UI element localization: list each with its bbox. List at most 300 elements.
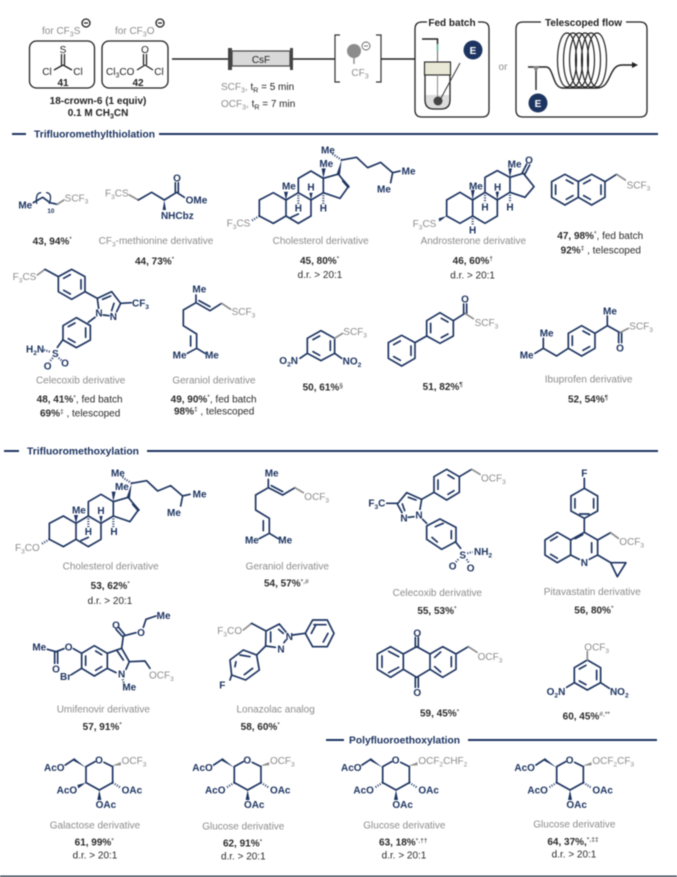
compound 49 geraniol derivative: 3 xyxy=(252,312,256,319)
reagent 42 box xyxy=(102,41,168,89)
compound 63 glucose derivative: AcO xyxy=(341,763,362,774)
compound 56 pitavastatin derivative: N xyxy=(581,558,588,569)
compound 52 ibuprofen derivative: Ibuprofen derivative xyxy=(545,375,633,386)
compound 49 geraniol derivative: ‡ xyxy=(194,406,198,413)
compound 60 dinitro OCF3 arene: 2 xyxy=(554,692,558,699)
compound 62 glucose derivative: O xyxy=(243,755,251,766)
compound 46 androsterone derivative: O xyxy=(525,156,533,167)
compound 46 androsterone derivative: CS xyxy=(422,219,437,230)
compound 53 cholesterol derivative: Me xyxy=(167,508,181,519)
compound 50 dinitro arene: NO xyxy=(343,357,358,368)
compound 47 naphthalene: 47, 98% xyxy=(557,231,594,242)
compound 59 anthraquinone: O xyxy=(413,629,421,640)
compound 53 cholesterol derivative: Me xyxy=(193,490,207,501)
residence time SCF3: R xyxy=(253,88,258,94)
compound 44: OMe xyxy=(186,196,208,207)
compound 50 dinitro arene: SCF xyxy=(343,327,363,338)
compound 60 dinitro OCF3 arene: NO xyxy=(610,687,625,698)
compound 64 glucose derivative: 3 xyxy=(630,761,634,768)
compound 46 androsterone derivative: H xyxy=(494,183,501,194)
compound 54 geraniol derivative: Me xyxy=(265,469,279,480)
compound 48 celecoxib derivative: 69% xyxy=(40,409,60,420)
compound 57 umifenovir derivative: O xyxy=(137,628,145,639)
compound 51 biphenyl thioester: 51, 82% xyxy=(423,382,459,393)
compound 61 galactose derivative: d.r. > 20:1 xyxy=(73,850,118,861)
compound 56 pitavastatin derivative: 3 xyxy=(640,542,644,549)
compound 46 androsterone derivative: H xyxy=(481,202,489,213)
compound 61 galactose derivative xyxy=(44,755,147,861)
compound 62 glucose derivative: 62, 91% xyxy=(223,839,260,850)
compound 49 geraniol derivative: , telescoped xyxy=(198,406,254,417)
compound 47 naphthalene: 3 xyxy=(647,186,651,193)
compound 44 xyxy=(99,174,214,267)
compound 45 cholesterol derivative: F xyxy=(227,219,233,230)
icon: negative charge xyxy=(156,19,164,27)
compound 55 celecoxib derivative xyxy=(368,469,506,599)
compound 43: Me xyxy=(18,200,33,211)
telescoped flow panel: Telescoped flow xyxy=(545,18,622,29)
compound 63 glucose derivative: OAc xyxy=(392,800,413,811)
compound 48 celecoxib derivative: * xyxy=(73,394,76,401)
compound 53 cholesterol derivative: Me xyxy=(72,505,86,516)
compound 55 celecoxib derivative: N xyxy=(415,510,423,521)
compound 53 cholesterol derivative: Me xyxy=(115,482,129,493)
compound 52 ibuprofen derivative: SCF xyxy=(629,322,649,333)
compound 53 cholesterol derivative xyxy=(15,469,207,607)
compound 57 umifenovir derivative: Me xyxy=(32,643,47,654)
compound 63 glucose derivative: AcO xyxy=(353,785,374,796)
section heading: Trifluoromethylthiolation: Trifluoromethylthiolation xyxy=(34,130,155,140)
compound 52 ibuprofen derivative: Me xyxy=(520,351,534,362)
compound 52 ibuprofen derivative: ¶ xyxy=(605,394,609,401)
compound 47 naphthalene: , fed batch xyxy=(597,231,643,242)
compound 44: 44, 73% xyxy=(135,256,172,267)
compound 63 glucose derivative: d.r. > 20:1 xyxy=(382,850,427,861)
compound 49 geraniol derivative: Me xyxy=(205,351,219,362)
compound 54 geraniol derivative: 3 xyxy=(325,497,329,504)
yield 55: * xyxy=(454,606,457,613)
reagent 41 box xyxy=(30,41,94,89)
compound 44: O xyxy=(173,174,181,185)
compound 46 androsterone derivative: 3 xyxy=(419,224,423,231)
residence time SCF3: 3 xyxy=(241,88,245,94)
compound 44: 3 xyxy=(111,194,115,201)
compound 52 ibuprofen derivative: O xyxy=(616,343,624,354)
compound 55 celecoxib derivative: F xyxy=(368,499,374,510)
compound 47 naphthalene: SCF xyxy=(627,180,647,191)
compound 48 celecoxib derivative: , telescoped xyxy=(64,409,120,420)
compound 49 geraniol derivative xyxy=(171,284,257,417)
compound 62 glucose derivative: OCF xyxy=(270,756,291,767)
compound 61 galactose derivative: * xyxy=(111,837,114,844)
compound 54 geraniol derivative: Geraniol derivative xyxy=(246,561,329,572)
compound 57 umifenovir derivative: Umifenovir derivative xyxy=(57,705,150,716)
compound 63 glucose derivative: 63, 18% xyxy=(379,838,416,849)
label: for CF3O anion: 3 xyxy=(143,32,147,38)
compound 55 celecoxib derivative: O xyxy=(467,564,475,575)
compound 43: 43, 94% xyxy=(33,236,69,247)
compound 58 lonazolac analog: 3 xyxy=(223,631,227,638)
compound 50 dinitro arene: 3 xyxy=(363,332,367,339)
reagent 41 box: Cl xyxy=(42,67,52,78)
compound 62 glucose derivative: d.r. > 20:1 xyxy=(221,851,266,862)
compound 59 anthraquinone xyxy=(377,629,503,720)
compound 58 lonazolac analog: F xyxy=(219,681,225,692)
flow line with CsF column: CsF xyxy=(252,55,270,66)
compound 60 dinitro OCF3 arene: 2 xyxy=(625,692,629,699)
compound 44: -methionine derivative xyxy=(116,236,214,247)
compound 43: SCF xyxy=(65,193,85,204)
compound 44: CS xyxy=(115,189,129,200)
compound 46 androsterone derivative: 46, 60% xyxy=(453,256,489,267)
reagent 41 box: Cl xyxy=(73,67,83,78)
compound 47 naphthalene: 92% xyxy=(561,245,581,256)
fed batch panel: Fed batch xyxy=(428,18,476,29)
compound 48 celecoxib derivative: S xyxy=(52,349,59,360)
compound 59 anthraquinone: 3 xyxy=(499,657,503,664)
compound 48 celecoxib derivative: N xyxy=(110,312,117,323)
compound 43: 10 xyxy=(47,208,55,215)
compound 54 geraniol derivative: OCF xyxy=(304,492,325,503)
bracketed CF3 anion intermediate xyxy=(335,35,415,82)
compound 58 lonazolac analog: F xyxy=(217,626,223,637)
reagent 42 box: O xyxy=(141,45,149,56)
compound 64 glucose derivative: CF xyxy=(617,756,630,767)
compound 45 cholesterol derivative: H xyxy=(295,204,302,215)
compound 47 naphthalene: * xyxy=(594,231,597,238)
compound 60 dinitro OCF3 arene: N xyxy=(558,687,565,698)
residence time OCF3: OCF xyxy=(221,99,242,110)
compound 45 cholesterol derivative: H xyxy=(320,204,327,215)
compound 48 celecoxib derivative: , fed batch xyxy=(76,395,123,406)
compound 63 glucose derivative: OCF xyxy=(418,756,439,767)
compound 58 lonazolac analog: N xyxy=(277,645,285,656)
compound 48 celecoxib derivative: O xyxy=(44,361,52,372)
yield 56: * xyxy=(611,605,614,612)
or: or xyxy=(499,62,508,73)
compound 49 geraniol derivative: 49, 90% xyxy=(171,394,207,405)
compound 58 lonazolac analog: N xyxy=(286,632,293,643)
compound 50 dinitro arene: § xyxy=(339,382,343,389)
compound 64 glucose derivative: AcO xyxy=(514,763,535,774)
compound 59 anthraquinone: OCF xyxy=(478,652,499,663)
compound 57 umifenovir derivative: O xyxy=(112,620,120,631)
compound 57 umifenovir derivative: 3 xyxy=(170,676,174,683)
compound 53 cholesterol derivative: Me xyxy=(111,469,125,480)
compound 55 celecoxib derivative: NH xyxy=(474,547,488,558)
label: for CF3S anion: S xyxy=(74,26,81,37)
compound 49 geraniol derivative: * xyxy=(207,394,210,401)
compound 63 glucose derivative: 2 xyxy=(439,761,443,768)
compound 62 glucose derivative: OAc xyxy=(270,785,291,796)
compound 55 celecoxib derivative: 3 xyxy=(374,504,378,511)
compound 55 celecoxib derivative: 3 xyxy=(502,479,506,486)
compound 50 dinitro arene xyxy=(279,327,367,394)
compound 58 lonazolac analog xyxy=(217,620,334,733)
compound 64 glucose derivative: 2 xyxy=(613,761,617,768)
compound 59 anthraquinone: O xyxy=(413,688,421,699)
yield 56: 56, 80% xyxy=(574,605,611,616)
compound 45 cholesterol derivative: d.r. > 20:1 xyxy=(298,270,343,281)
compound 47 naphthalene xyxy=(552,174,651,256)
reagent 42 box: Cl xyxy=(106,67,115,78)
compound 60 dinitro OCF3 arene: O xyxy=(547,687,554,698)
compound 55 celecoxib derivative: S xyxy=(459,550,466,561)
reagent 42 box: CO xyxy=(119,67,135,78)
compound 53 cholesterol derivative: H xyxy=(85,527,92,538)
compound 55 celecoxib derivative: Celecoxib derivative xyxy=(393,588,482,599)
compound 44: 3 xyxy=(112,241,116,248)
compound 49 geraniol derivative: SCF xyxy=(232,307,252,318)
compound 53 cholesterol derivative: d.r. > 20:1 xyxy=(88,596,133,607)
residence time OCF3: = 7 min xyxy=(259,99,295,110)
compound 53 cholesterol derivative: 53, 62% xyxy=(91,581,127,592)
compound 62 glucose derivative: 3 xyxy=(291,761,295,768)
label: for CF3O anion: for CF xyxy=(115,26,143,37)
residence time OCF3: t xyxy=(252,99,254,110)
compound 61 galactose derivative: OAc xyxy=(96,800,117,811)
yield 55: 55, 53% xyxy=(417,606,454,617)
solvent text: 3 xyxy=(110,114,114,120)
compound 59 anthraquinone: 59, 45% xyxy=(420,709,457,720)
compound 57 umifenovir derivative: 57, 91% xyxy=(83,722,119,733)
compound 50 dinitro arene: 2 xyxy=(358,362,362,369)
compound 64 glucose derivative: d.r. > 20:1 xyxy=(552,849,597,860)
compound 48 celecoxib derivative: O xyxy=(61,359,69,370)
compound 64 glucose derivative: OAc xyxy=(592,785,613,796)
label: for CF3O anion: O xyxy=(147,26,155,37)
compound 45 cholesterol derivative: Me xyxy=(402,166,416,177)
compound 50 dinitro arene: 2 xyxy=(287,361,291,368)
compound 54 geraniol derivative: Me xyxy=(245,536,259,547)
compound 49 geraniol derivative: , fed batch xyxy=(210,394,257,405)
compound 61 galactose derivative: 61, 99% xyxy=(75,838,111,849)
reagent 41 box: 41 xyxy=(57,78,69,89)
compound 53 cholesterol derivative: H xyxy=(110,527,118,538)
compound 44: F xyxy=(105,189,111,200)
reagent 42 box: 42 xyxy=(132,78,144,89)
compound 47 naphthalene: , telescoped xyxy=(584,245,641,256)
compound 57 umifenovir derivative: * xyxy=(119,722,122,729)
compound 51 biphenyl thioester: 3 xyxy=(495,323,499,330)
compound 52 ibuprofen derivative: 3 xyxy=(649,327,653,334)
compound 46 androsterone derivative xyxy=(413,156,534,281)
compound 57 umifenovir derivative: N xyxy=(118,669,125,680)
compound 48 celecoxib derivative: F xyxy=(13,272,19,283)
compound 44: * xyxy=(172,256,175,263)
compound 51 biphenyl thioester xyxy=(388,295,499,393)
compound 55 celecoxib derivative: 2 xyxy=(488,552,492,559)
compound 48 celecoxib derivative: 3 xyxy=(145,304,149,311)
compound 55 celecoxib derivative: O xyxy=(449,561,457,572)
conditions text: 18-crown-6 (1 equiv) xyxy=(50,96,146,107)
compound 61 galactose derivative: 3 xyxy=(143,761,147,768)
residence time OCF3: 3 xyxy=(242,104,246,112)
telescoped flow panel: E xyxy=(535,99,542,110)
compound 52 ibuprofen derivative: 52, 54% xyxy=(568,395,605,406)
compound 62 glucose derivative: OAc xyxy=(244,800,265,811)
bracketed CF3 anion intermediate: 3 xyxy=(365,74,369,80)
compound 62 glucose derivative xyxy=(192,755,295,862)
compound 62 glucose derivative: AcO xyxy=(192,763,213,774)
compound 60 dinitro OCF3 arene: OCF xyxy=(584,643,605,654)
compound 64 glucose derivative xyxy=(514,755,634,860)
compound 56 pitavastatin derivative: OCF xyxy=(619,537,640,548)
compound 55 celecoxib derivative: C xyxy=(378,499,385,510)
compound 64 glucose derivative: O xyxy=(566,755,574,766)
compound 58 lonazolac analog: 58, 60% xyxy=(241,722,277,733)
compound 62 glucose derivative: Glucose derivative xyxy=(202,821,285,832)
compound 56 pitavastatin derivative: Pitavastatin derivative xyxy=(544,587,641,598)
solvent text: 0.1 M CH xyxy=(68,108,110,119)
compound 45 cholesterol derivative: 3 xyxy=(233,224,237,231)
compound 60 dinitro OCF3 arene xyxy=(547,643,629,722)
residence time SCF3: = 5 min xyxy=(258,82,294,93)
compound 50 dinitro arene: 50, 61% xyxy=(303,383,339,394)
compound 45 cholesterol derivative: H xyxy=(307,183,315,194)
compound 46 androsterone derivative: F xyxy=(413,219,419,230)
compound 61 galactose derivative: OCF xyxy=(122,756,143,767)
section heading: Polyfluoroethoxylation: Polyfluoroethoxylation xyxy=(349,736,460,746)
compound 51 biphenyl thioester: O xyxy=(461,295,469,306)
compound 53 cholesterol derivative: F xyxy=(15,543,21,554)
compound 48 celecoxib derivative: 3 xyxy=(19,277,23,284)
compound 63 glucose derivative: Glucose derivative xyxy=(363,820,446,831)
compound 61 galactose derivative: Galactose derivative xyxy=(50,820,141,831)
compound 54 geraniol derivative xyxy=(245,469,329,590)
residence time SCF3: SCF xyxy=(221,82,241,93)
compound 46 androsterone derivative: † xyxy=(489,256,493,263)
compound 48 celecoxib derivative: Celecoxib derivative xyxy=(36,375,126,386)
compound 46 androsterone derivative: Me xyxy=(469,181,483,192)
compound 61 galactose derivative: O xyxy=(95,755,103,766)
icon: negative charge xyxy=(82,19,90,27)
compound 43 xyxy=(18,193,89,247)
compound 45 cholesterol derivative: 45, 80% xyxy=(300,256,337,267)
compound 61 galactose derivative: AcO xyxy=(57,785,77,796)
compound 51 biphenyl thioester: ¶ xyxy=(459,382,463,389)
compound 48 celecoxib derivative: N xyxy=(37,345,44,356)
compound 63 glucose derivative xyxy=(341,755,468,861)
compound 64 glucose derivative: Glucose derivative xyxy=(533,819,616,830)
fed batch panel xyxy=(415,18,489,117)
compound 62 glucose derivative: AcO xyxy=(205,785,226,796)
compound 62 glucose derivative: * xyxy=(260,838,263,845)
compound 44: CF xyxy=(99,236,112,247)
compound 53 cholesterol derivative: 3 xyxy=(21,548,25,555)
compound 50 dinitro arene: O xyxy=(279,356,287,367)
compound 58 lonazolac analog: * xyxy=(277,722,280,729)
compound 53 cholesterol derivative: CO xyxy=(25,543,40,554)
compound 60 dinitro OCF3 arene: #,** xyxy=(599,711,610,718)
compound 57 umifenovir derivative: Me xyxy=(122,683,137,694)
compound 48 celecoxib derivative: 48, 41% xyxy=(37,395,73,406)
compound 64 glucose derivative: *,‡‡ xyxy=(587,837,599,844)
compound 54 geraniol derivative: 54, 57% xyxy=(264,579,301,590)
compound 64 glucose derivative: 64, 37%, xyxy=(547,837,587,848)
compound 53 cholesterol derivative: H xyxy=(97,506,105,517)
compound 45 cholesterol derivative: Me xyxy=(319,159,334,170)
compound 59 anthraquinone: * xyxy=(457,708,460,715)
compound 57 umifenovir derivative: Me xyxy=(157,611,171,622)
compound 54 geraniol derivative: Me xyxy=(278,536,293,547)
compound 45 cholesterol derivative: * xyxy=(337,256,340,263)
compound 53 cholesterol derivative: Cholesterol derivative xyxy=(63,561,159,572)
compound 53 cholesterol derivative: * xyxy=(127,581,130,588)
compound 45 cholesterol derivative: CS xyxy=(236,219,251,230)
compound 64 glucose derivative: OCF xyxy=(592,756,613,767)
compound 57 umifenovir derivative: Br xyxy=(60,672,71,683)
compound 43: 3 xyxy=(85,199,89,206)
compound 57 umifenovir derivative: OCF xyxy=(149,671,170,682)
compound 51 biphenyl thioester: SCF xyxy=(475,318,495,329)
compound 48 celecoxib derivative: H xyxy=(26,345,33,356)
compound 63 glucose derivative: CHF xyxy=(443,756,464,767)
compound 45 cholesterol derivative: Me xyxy=(282,181,296,192)
compound 63 glucose derivative: OAc xyxy=(418,785,439,796)
compound 44: NHCbz xyxy=(161,211,194,222)
compound 56 pitavastatin derivative: F xyxy=(581,469,587,480)
compound 49 geraniol derivative: Me xyxy=(173,351,187,362)
reagent 42 box: Cl xyxy=(154,67,164,78)
residence time OCF3: R xyxy=(254,104,259,112)
telescoped flow panel xyxy=(516,18,647,117)
compound 46 androsterone derivative: d.r. > 20:1 xyxy=(450,270,495,281)
compound 57 umifenovir derivative xyxy=(32,611,174,733)
compound 52 ibuprofen derivative: Me xyxy=(603,307,617,318)
solvent text: CN xyxy=(114,108,128,119)
compound 48 celecoxib derivative: N xyxy=(95,309,103,320)
compound 45 cholesterol derivative: Me xyxy=(377,185,391,196)
section heading: Trifluoromethoxylation: Trifluoromethoxylation xyxy=(27,446,139,458)
compound 45 cholesterol derivative: Cholesterol derivative xyxy=(273,236,369,247)
flow line with CsF column xyxy=(172,48,335,70)
compound 47 naphthalene: ‡ xyxy=(581,245,585,252)
reagent 42 box: 3 xyxy=(115,72,119,80)
compound 46 androsterone derivative: Me xyxy=(508,159,522,170)
residence time SCF3: , xyxy=(245,82,248,93)
compound 48 celecoxib derivative: 2 xyxy=(33,350,37,357)
compound 45 cholesterol derivative: Me xyxy=(321,145,335,156)
compound 60 dinitro OCF3 arene: 3 xyxy=(605,648,609,655)
compound 55 celecoxib derivative: OCF xyxy=(481,474,502,485)
reaction scheme header xyxy=(30,18,647,120)
label: for CF3S anion: for CF xyxy=(42,26,70,37)
compound 61 galactose derivative: AcO xyxy=(44,763,65,774)
label: for CF3S anion: 3 xyxy=(70,32,74,38)
compound 46 androsterone derivative: Androsterone derivative xyxy=(421,236,526,247)
compound 46 androsterone derivative: H xyxy=(506,202,514,213)
compound 48 celecoxib derivative: ‡ xyxy=(60,408,64,415)
reagent 41 box: S xyxy=(60,45,67,56)
compound 52 ibuprofen derivative xyxy=(520,307,653,406)
compound 49 geraniol derivative: Geraniol derivative xyxy=(172,375,256,386)
compound 56 pitavastatin derivative xyxy=(544,469,644,598)
compound 50 dinitro arene: N xyxy=(291,356,298,367)
compound 63 glucose derivative: O xyxy=(392,755,400,766)
compound 48 celecoxib derivative: CS xyxy=(22,272,37,283)
residence time SCF3: t xyxy=(250,82,253,93)
compound 48 celecoxib derivative xyxy=(13,269,149,420)
compound 45 cholesterol derivative xyxy=(227,145,416,281)
fed batch panel: E xyxy=(470,46,477,57)
compound 64 glucose derivative: OAc xyxy=(566,800,587,811)
compound 63 glucose derivative: *,†† xyxy=(416,837,428,844)
bracketed CF3 anion intermediate: CF xyxy=(351,68,365,79)
compound 58 lonazolac analog: Lonazolac analog xyxy=(236,705,315,716)
compound 55 celecoxib derivative: N xyxy=(400,514,408,525)
compound 48 celecoxib derivative: CF xyxy=(132,299,145,310)
